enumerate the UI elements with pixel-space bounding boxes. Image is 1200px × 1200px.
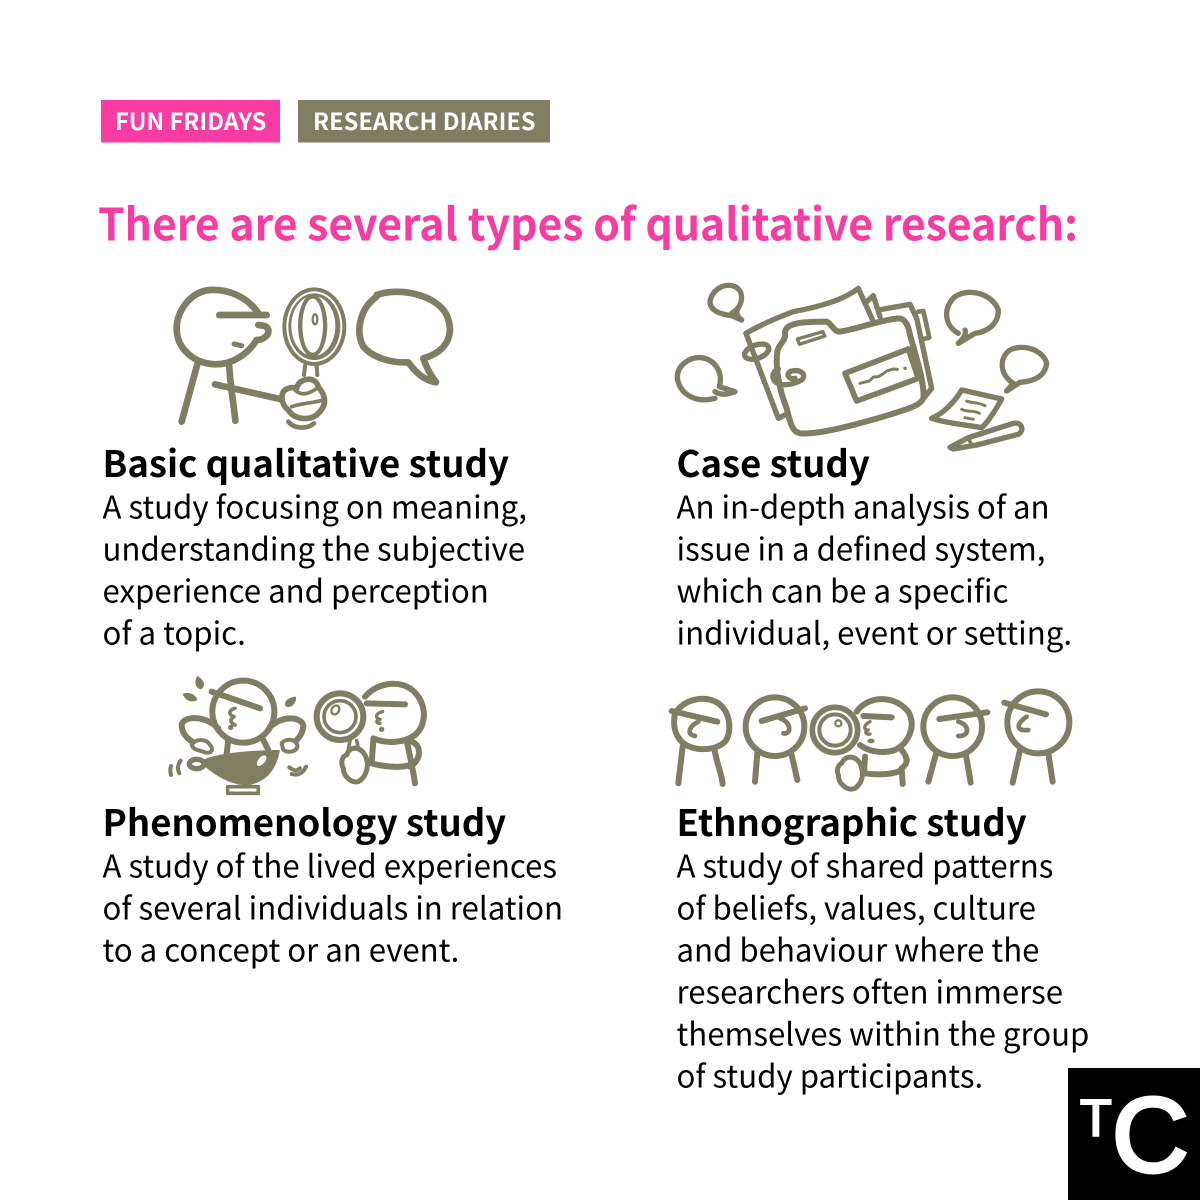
description: which can be a specific xyxy=(676,566,1008,612)
description: of a topic. xyxy=(102,608,246,654)
panel: phenomenology study xyxy=(102,676,563,970)
icon: group of people observed through a magnifying glass xyxy=(672,691,1069,789)
description: An in-depth analysis of an xyxy=(676,482,1050,528)
title: There are several types of qualitative research: xyxy=(98,188,1078,254)
description: researchers often immerse xyxy=(676,968,1063,1012)
description: A study of the lived experiences xyxy=(102,842,557,886)
heading: Case study xyxy=(676,435,870,488)
description: of beliefs, values, culture xyxy=(676,884,1036,928)
heading: Basic qualitative study xyxy=(102,435,509,488)
heading: Ethnographic study xyxy=(676,794,1027,847)
tag: Fun Fridays: FUN FRIDAYS xyxy=(115,103,266,137)
description: experience and perception xyxy=(102,566,489,612)
description: understanding the subjective xyxy=(102,524,525,570)
logo: TC xyxy=(1068,1068,1200,1200)
tag: Fun Fridays xyxy=(101,100,280,142)
tag: Research Diaries: RESEARCH DIARIES xyxy=(313,103,536,137)
icon: person with magnifying glass and speech bubble xyxy=(177,287,450,428)
description: A study focusing on meaning, xyxy=(102,482,527,528)
heading: Phenomenology study xyxy=(102,794,506,847)
description: A study of shared patterns xyxy=(676,842,1053,886)
description: individual, event or setting. xyxy=(676,608,1072,654)
logo: TC: C xyxy=(1112,1076,1189,1194)
description: of study participants. xyxy=(676,1052,983,1096)
panel: case study xyxy=(676,285,1072,654)
description: and behaviour where the xyxy=(676,926,1039,970)
description: to a concept or an event. xyxy=(102,926,459,970)
panel: basic qualitative study xyxy=(102,287,527,654)
icon: person cooking and person with magnifying glass xyxy=(170,676,424,793)
description: issue in a defined system, xyxy=(676,524,1045,570)
description: of several individuals in relation xyxy=(102,884,563,928)
description: themselves within the group xyxy=(676,1010,1089,1054)
icon: case folder with speech bubbles, note and pencil xyxy=(677,285,1047,449)
logo: TC: T xyxy=(1080,1090,1112,1148)
panel: ethnographic study xyxy=(672,691,1089,1096)
